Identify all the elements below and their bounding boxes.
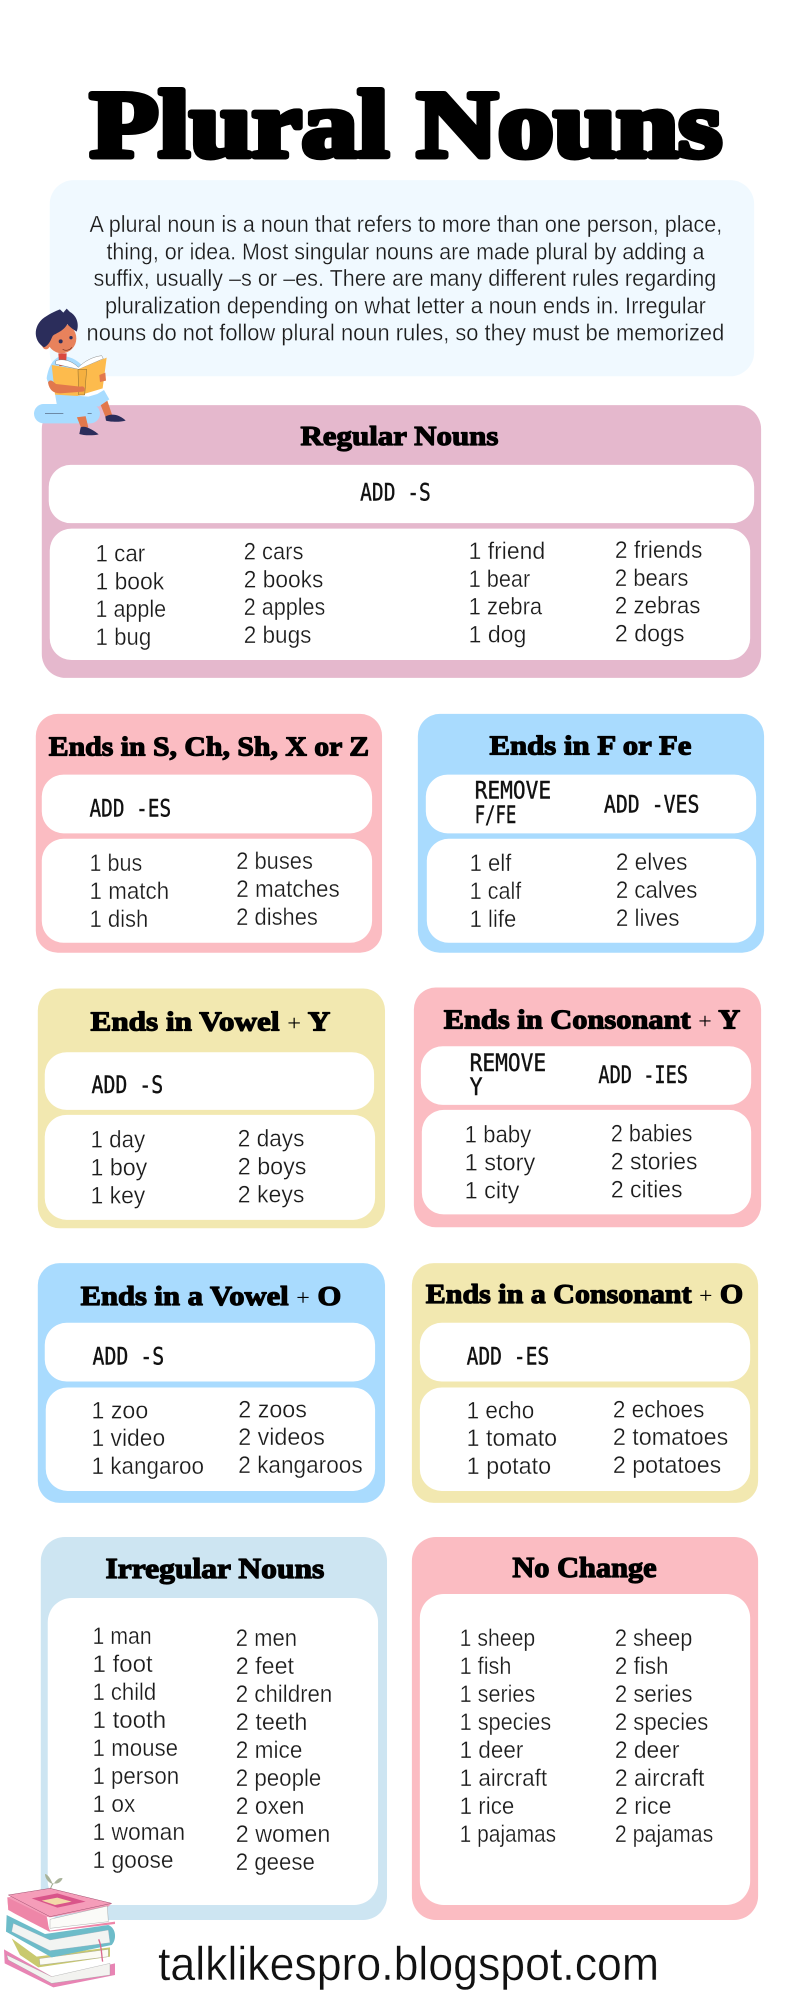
title: Plural Nouns (90, 72, 722, 178)
panel: ends in a vowel + o (38, 1263, 385, 1503)
heading: no change: No Change (512, 1553, 657, 1584)
rule bar: remove f/fe, add -ves: ADD -VES (604, 790, 699, 818)
word list: s, ch, sh, x, z (42, 839, 372, 943)
panel: introduction: thing, or idea. Most singular nouns are made plural by adding a (106, 238, 704, 264)
word list: vowel + o: 1 zoo (92, 1397, 148, 1424)
word list: irregular nouns: 2 people (236, 1765, 321, 1792)
heading: regular nouns: Regular Nouns (300, 421, 499, 452)
word list: consonant + y: 2 babies (611, 1121, 693, 1148)
word list: consonant + y (422, 1110, 751, 1214)
panel: regular nouns (42, 405, 761, 678)
heading: ends in a vowel + o: Ends in a Vowel + O (81, 1281, 341, 1312)
word list: f or fe: 2 elves (616, 849, 688, 876)
word list: vowel + o: 2 videos (238, 1424, 325, 1451)
word list: s, ch, sh, x, z: 2 dishes (236, 904, 318, 931)
word list: irregular nouns: 2 oxen (236, 1793, 304, 1820)
word list: irregular nouns: 1 person (93, 1763, 179, 1790)
word list: vowel + y: 1 day (91, 1127, 145, 1154)
panel: introduction (50, 180, 754, 376)
word list: regular nouns: 1 book (96, 568, 164, 595)
heading: ends in s, ch, sh, x or z: Ends in S, Ch, Sh, X or Z (49, 732, 369, 763)
word list: irregular nouns: 2 geese (236, 1849, 315, 1876)
word list: no change: 1 deer (460, 1737, 523, 1764)
heading: ends in vowel + y: Ends in Vowel + Y (91, 1006, 330, 1037)
icon: stack of books with plant (4, 1874, 115, 1987)
word list: vowel + y: 1 boy (91, 1155, 147, 1182)
rule bar: add -s (45, 1323, 375, 1382)
rule bar: add -es: ADD -ES (90, 794, 171, 822)
rule bar: remove f/fe, add -ves: F/FE (475, 801, 516, 829)
word list: regular nouns: 1 bug (96, 624, 151, 651)
word list: consonant + o (420, 1387, 750, 1491)
word list: irregular nouns: 2 teeth (236, 1709, 307, 1736)
word list: regular nouns: 1 bear (469, 566, 530, 593)
word list: consonant + o: 1 echo (467, 1397, 534, 1424)
word list: vowel + o: 2 kangaroos (238, 1452, 363, 1479)
word list: irregular nouns: 1 mouse (93, 1735, 178, 1762)
heading: irregular nouns: Irregular Nouns (105, 1554, 324, 1585)
word list: s, ch, sh, x, z: 1 dish (90, 906, 148, 933)
rule bar: remove y, add -ies (421, 1046, 751, 1105)
word list: regular nouns: 2 bugs (244, 622, 311, 649)
word list: vowel + o: 1 kangaroo (92, 1453, 204, 1480)
word list: f or fe (427, 839, 756, 943)
word list: s, ch, sh, x, z: 2 matches (236, 876, 340, 903)
rule bar: add -s: ADD -S (93, 1343, 164, 1371)
word list: irregular nouns: 1 man (93, 1623, 152, 1650)
word list: vowel + o (46, 1387, 375, 1491)
rule bar: add -s (49, 465, 754, 523)
word list: vowel + y: 2 keys (238, 1181, 304, 1208)
word list: no change: 1 series (460, 1681, 535, 1708)
word list: irregular nouns: 2 mice (236, 1737, 302, 1764)
word list: regular nouns: 1 zebra (469, 594, 543, 621)
word list: no change: 2 aircraft (615, 1765, 705, 1792)
word list: consonant + o: 2 echoes (613, 1396, 704, 1423)
word list: f or fe: 2 calves (616, 877, 697, 904)
word list: no change: 2 pajamas (615, 1821, 713, 1848)
icon: boy reading a book (34, 309, 126, 435)
word list: regular nouns: 1 friend (469, 538, 545, 565)
panel: irregular nouns (41, 1537, 387, 1920)
word list: consonant + y: 2 stories (611, 1149, 697, 1176)
rule bar: remove y, add -ies: ADD -IES (598, 1061, 688, 1089)
word list: no change (420, 1594, 750, 1905)
word list: no change: 1 rice (460, 1793, 514, 1820)
word list: irregular nouns: 1 tooth (93, 1707, 166, 1734)
word list: s, ch, sh, x, z: 1 bus (90, 850, 142, 877)
panel: ends in s, ch, sh, x or z (36, 714, 382, 953)
word list: f or fe: 1 life (470, 906, 516, 933)
word list: regular nouns: 2 cars (244, 538, 304, 565)
panel: introduction: A plural noun is a noun that refers to more than one person, place, (90, 211, 722, 237)
word list: irregular nouns: 2 children (236, 1681, 332, 1708)
panel: ends in vowel + y (38, 989, 385, 1228)
word list: f or fe: 2 lives (616, 905, 680, 932)
word list: consonant + o: 1 tomato (467, 1425, 557, 1452)
word list: irregular nouns: 1 woman (93, 1819, 185, 1846)
heading: ends in f or fe: Ends in F or Fe (489, 731, 691, 762)
word list: regular nouns: 2 bears (615, 565, 689, 592)
word list: consonant + y: 1 story (465, 1150, 535, 1177)
word list: consonant + o: 2 potatoes (613, 1452, 721, 1479)
word list: no change: 2 species (615, 1709, 708, 1736)
word list: no change: 2 series (615, 1681, 692, 1708)
rule bar: remove y, add -ies: Y (470, 1073, 483, 1101)
word list: regular nouns: 2 friends (615, 537, 702, 564)
panel: introduction: nouns do not follow plural noun rules, so they must be memorized (87, 319, 724, 345)
word list: regular nouns (50, 529, 750, 660)
word list: s, ch, sh, x, z: 1 match (90, 878, 169, 905)
word list: f or fe: 1 elf (470, 850, 512, 877)
word list: irregular nouns: 1 foot (93, 1651, 153, 1678)
rule bar: add -s: ADD -S (92, 1071, 163, 1099)
word list: no change: 1 sheep (460, 1625, 535, 1652)
rule bar: add -es (420, 1323, 750, 1382)
word list: no change: 2 deer (615, 1737, 680, 1764)
word list: irregular nouns: 1 ox (93, 1791, 135, 1818)
rule bar: add -es (42, 775, 372, 833)
word list: consonant + y: 2 cities (611, 1176, 683, 1203)
rule bar: remove f/fe, add -ves (426, 775, 756, 833)
word list: vowel + y: 1 key (91, 1182, 145, 1209)
word list: consonant + y: 1 city (465, 1177, 519, 1204)
word list: consonant + y: 1 baby (465, 1122, 531, 1149)
panel: introduction: pluralization depending on what letter a noun ends in. Irregular (105, 293, 706, 319)
word list: s, ch, sh, x, z: 2 buses (236, 848, 313, 875)
word list: no change: 1 aircraft (460, 1765, 548, 1792)
panel: ends in f or fe (418, 714, 764, 953)
rule bar: add -s (45, 1052, 374, 1110)
word list: irregular nouns: 1 child (93, 1679, 156, 1706)
rule bar: add -s: ADD -S (360, 479, 431, 507)
word list: vowel + o: 1 video (92, 1425, 165, 1452)
word list: no change: 1 fish (460, 1653, 511, 1680)
word list: irregular nouns: 2 women (236, 1821, 330, 1848)
heading: ends in consonant + y: Ends in Consonant + Y (444, 1004, 740, 1035)
word list: irregular nouns: 1 goose (93, 1847, 174, 1874)
word list: irregular nouns (48, 1598, 378, 1905)
rule bar: remove y, add -ies: REMOVE (470, 1049, 546, 1077)
word list: f or fe: 1 calf (470, 878, 522, 905)
rule bar: add -es: ADD -ES (467, 1343, 549, 1371)
word list: no change: 2 fish (615, 1653, 669, 1680)
word list: regular nouns: 2 dogs (615, 621, 685, 648)
panel: ends in consonant + y (414, 988, 761, 1227)
footer: website url: talklikespro.blogspot.com (158, 1937, 659, 1990)
word list: regular nouns: 2 apples (244, 594, 325, 621)
word list: consonant + o: 2 tomatoes (613, 1424, 728, 1451)
rule bar: remove f/fe, add -ves: REMOVE (475, 776, 551, 804)
word list: no change: 1 species (460, 1709, 551, 1736)
word list: regular nouns: 1 car (96, 540, 145, 567)
word list: regular nouns: 2 books (244, 566, 323, 593)
panel: ends in a consonant + o (412, 1263, 758, 1503)
word list: regular nouns: 1 dog (469, 622, 526, 649)
word list: irregular nouns: 2 feet (236, 1653, 294, 1680)
word list: regular nouns: 2 zebras (615, 593, 700, 620)
word list: no change: 2 rice (615, 1793, 672, 1820)
word list: vowel + y: 2 days (238, 1126, 305, 1153)
word list: irregular nouns: 2 men (236, 1625, 297, 1652)
word list: vowel + y (45, 1115, 375, 1220)
word list: no change: 2 sheep (615, 1625, 692, 1652)
word list: vowel + o: 2 zoos (238, 1396, 307, 1423)
word list: consonant + o: 1 potato (467, 1453, 551, 1480)
panel: no change (412, 1537, 758, 1920)
heading: ends in a consonant + o: Ends in a Consonant + O (426, 1279, 743, 1310)
word list: vowel + y: 2 boys (238, 1154, 306, 1181)
word list: no change: 1 pajamas (460, 1821, 556, 1848)
word list: regular nouns: 1 apple (96, 596, 166, 623)
panel: introduction: suffix, usually –s or –es. There are many different rules regarding (94, 265, 716, 291)
